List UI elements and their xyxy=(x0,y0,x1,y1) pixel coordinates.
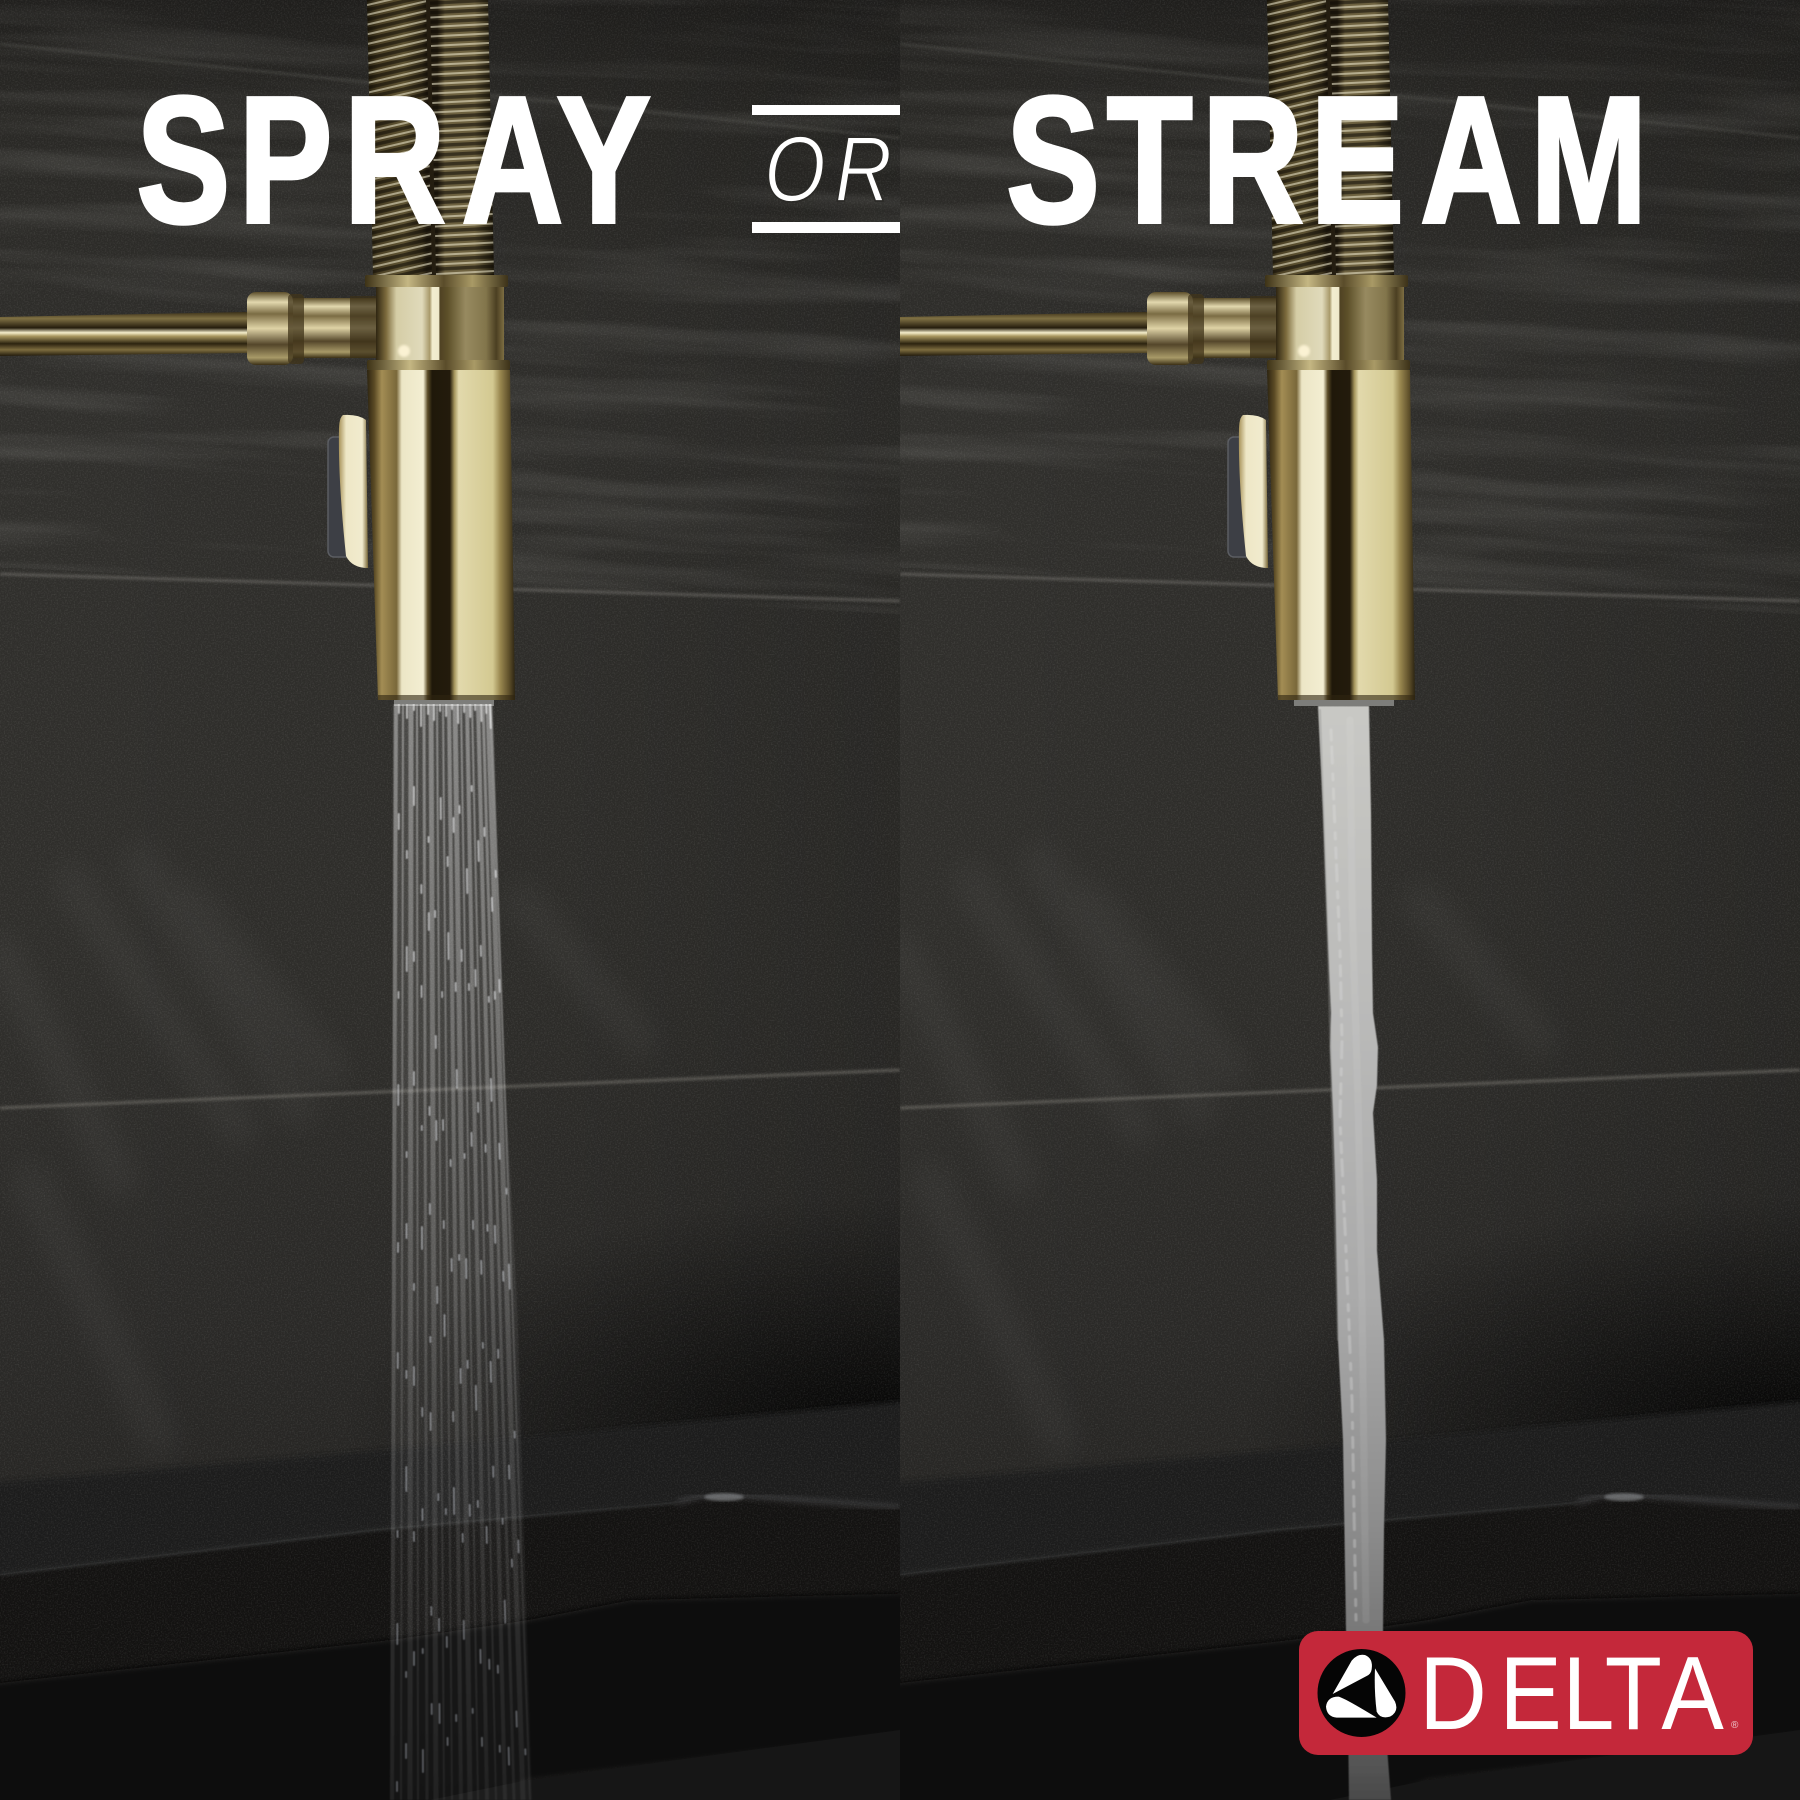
OR divider with rules xyxy=(752,105,900,233)
title: SPRAY: SPRAY xyxy=(136,60,651,261)
stream water xyxy=(1318,706,1391,1800)
panel: stream photo background with wall, counter and faucet xyxy=(766,0,1800,1800)
wordmark: DELTA: DELTA xyxy=(1419,1634,1724,1751)
title: STREAM: STREAM xyxy=(1006,60,1647,261)
OR divider with rules: OR xyxy=(764,118,892,221)
spray water xyxy=(390,704,532,1800)
registered mark: ® xyxy=(1731,1720,1739,1731)
Delta logo badge xyxy=(1299,1631,1753,1755)
icon: Delta triangle mark xyxy=(1318,1649,1406,1737)
panel: spray photo background with wall, counter and faucet xyxy=(0,0,1038,1800)
